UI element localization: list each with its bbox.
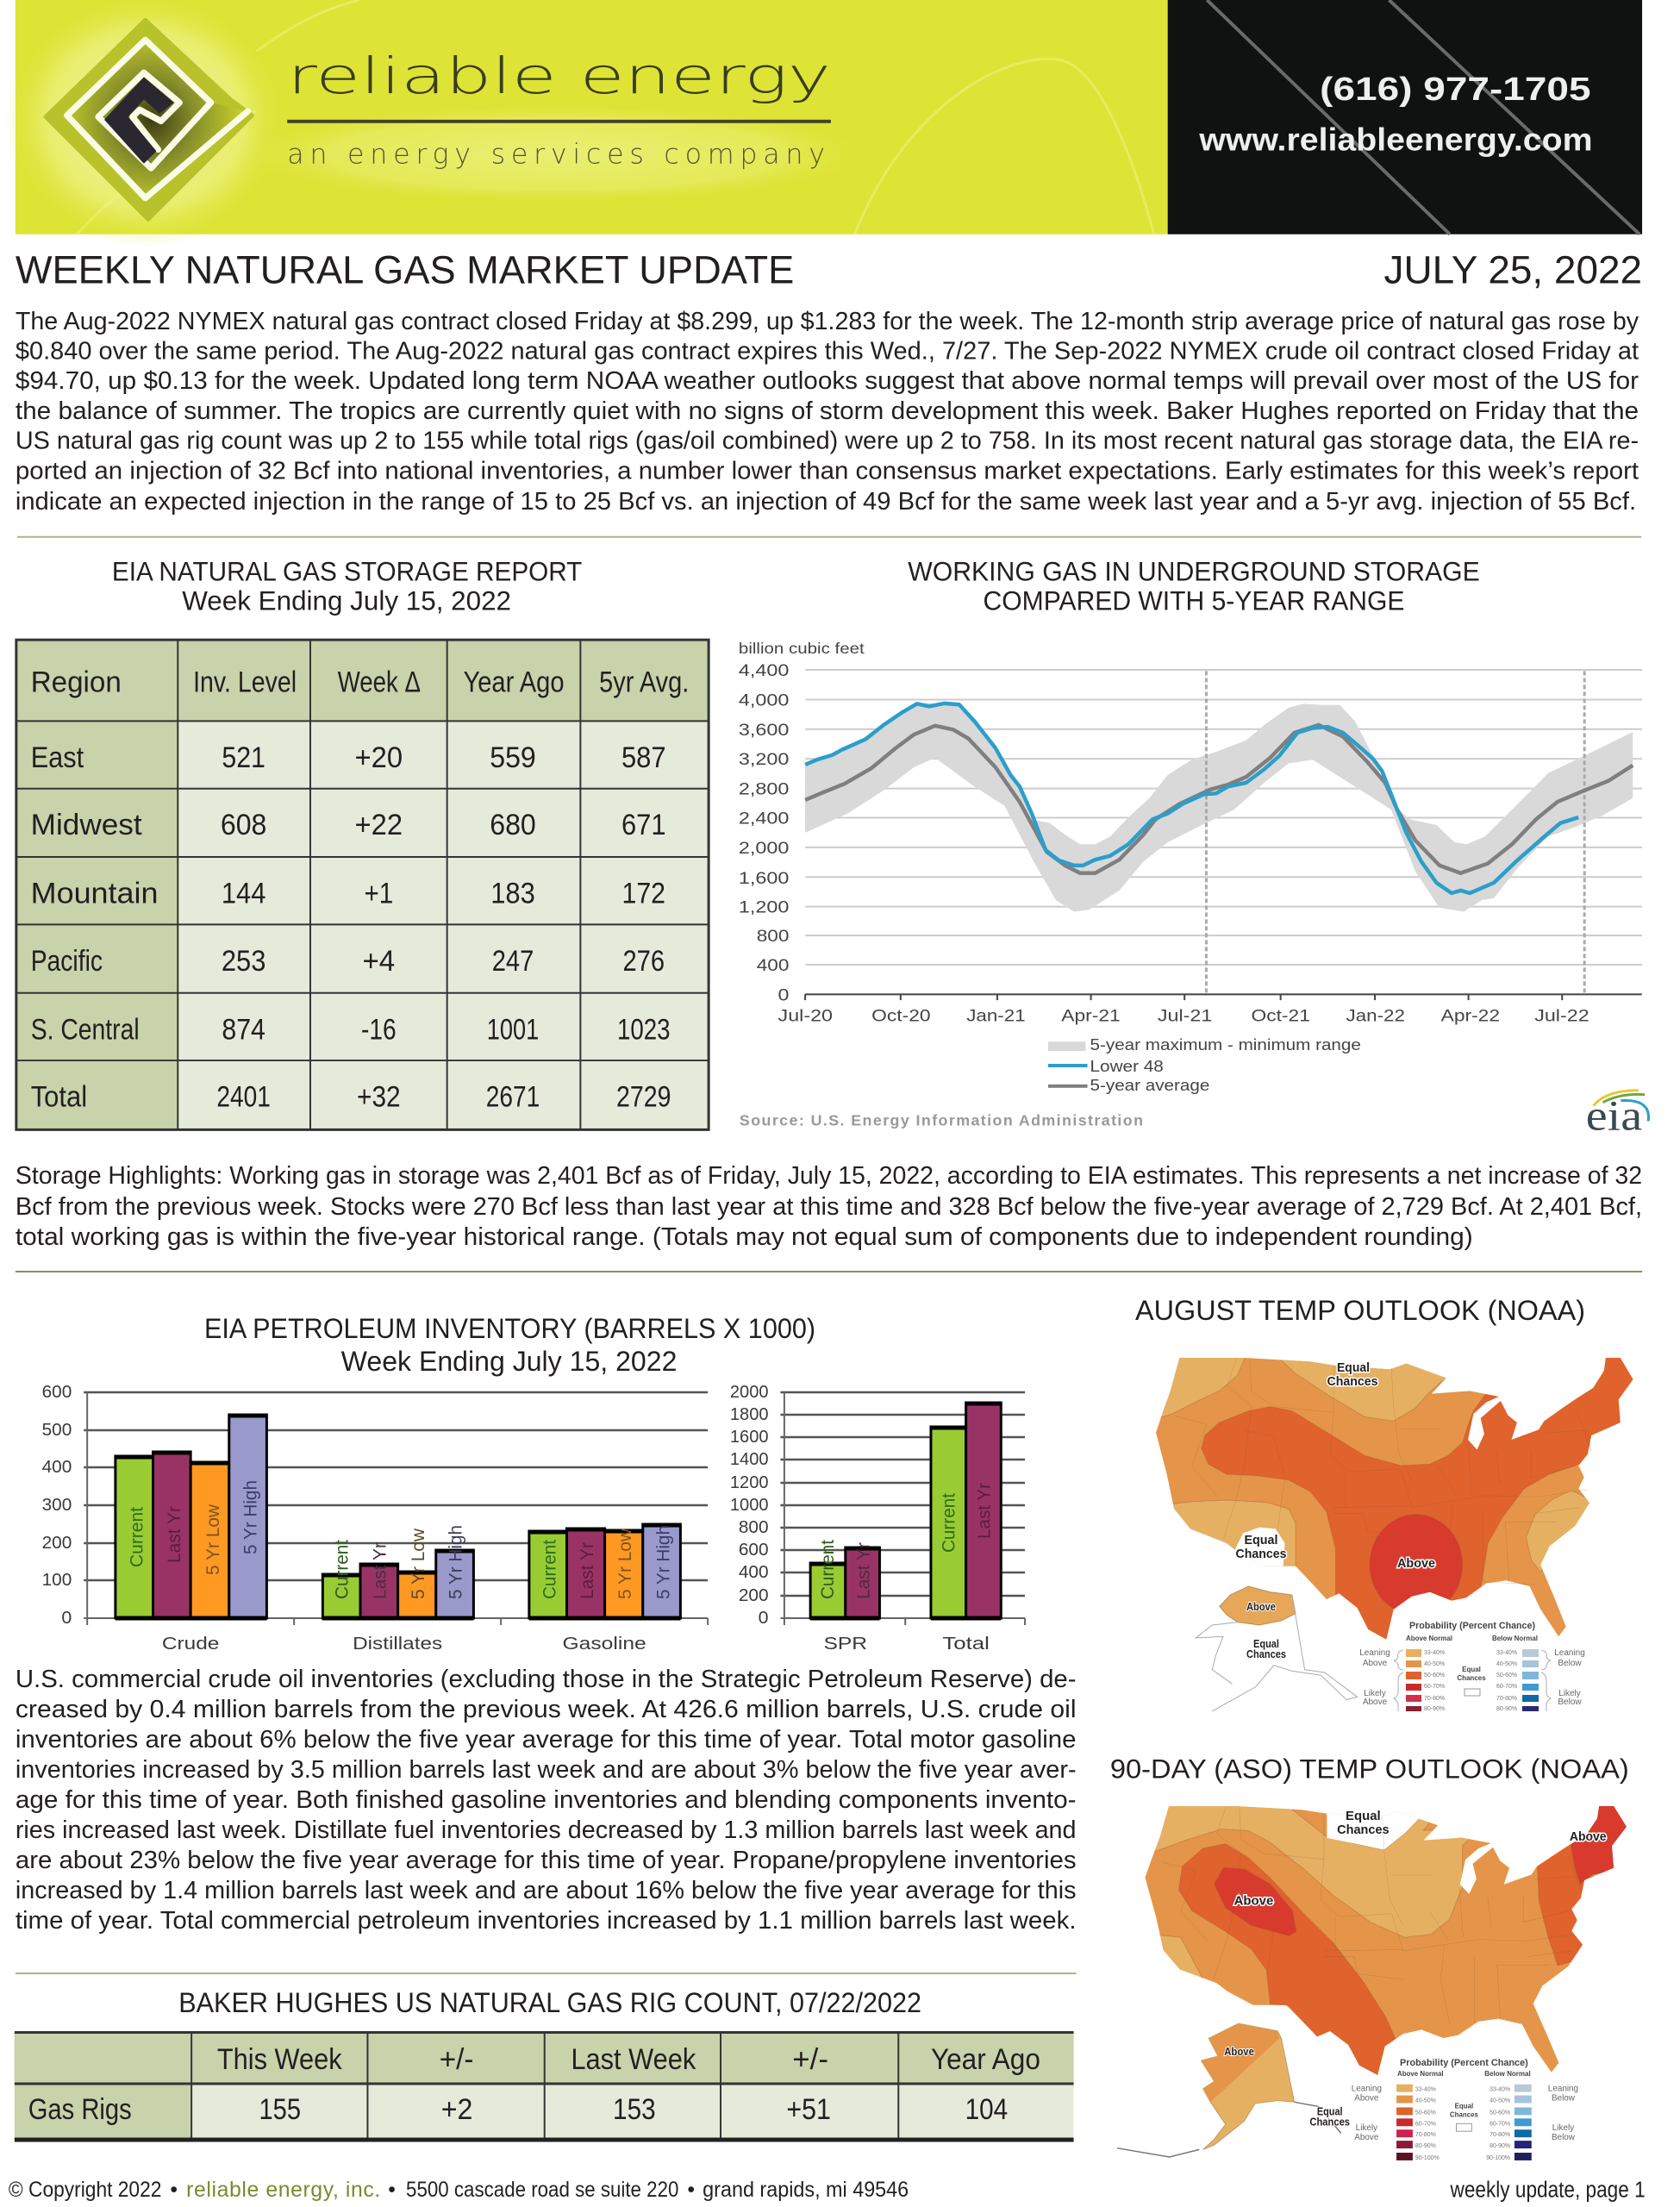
footer: copyright and address: • [687,2178,695,2202]
y axis labels: 0 [61,1609,72,1628]
table: natural gas storage: Region [31,666,122,699]
heading: storage report: Week Ending July 15, 2022 [182,585,511,616]
y axis labels: 1400 [730,1450,769,1469]
bars: crude [116,1415,266,1618]
y axis labels: 400 [757,956,789,975]
company name: reliable energy [287,47,831,105]
map labels [1236,1360,1435,1660]
map labels: Chances [1246,1647,1286,1660]
x axis labels: Jul-22 [1534,1006,1589,1025]
map legend: probability: 60-70% [1415,2121,1436,2127]
text block: storage highlights: total working gas is within the five-year historical range. (Totals may not equal sum of components due to independent rounding) [16,1223,1473,1251]
table: natural gas storage: East [31,741,84,774]
text block: petroleum summary [16,1666,1077,1935]
footer: copyright and address: • [170,2178,178,2202]
table: natural gas storage: 253 [222,945,265,978]
table: rig count: +51 [786,2093,831,2126]
map legend: probability: 40-50% [1424,1661,1445,1667]
map legend: probability: Chances [1450,2110,1479,2118]
table: natural gas storage: -16 [361,1013,397,1046]
y axis labels: 200 [42,1534,72,1553]
map legend: probability: Leaning [1554,1648,1585,1658]
table: natural gas storage: 5yr Avg. [599,666,689,699]
map labels: Above [1246,1600,1276,1613]
map legend: probability: 40-50% [1415,2098,1436,2104]
table: natural gas storage: +1 [364,878,393,910]
map labels: Chances [1327,1374,1377,1389]
map labels: Chances [1236,1547,1286,1561]
text block: market summary: $0.840 over the same period. The Aug-2022 natural gas contract expires this Wed., 7/27. The Sep-2022 NYMEX crude oil contract closed Friday at [16,338,1639,366]
y axis labels: 4,400 [739,661,789,680]
section: storage report [16,556,709,1129]
table: natural gas storage: Total [31,1081,87,1114]
table: natural gas storage: 874 [222,1013,265,1046]
bars: gasoline [529,1524,680,1618]
map labels: Above [1397,1556,1435,1571]
panel: black contact band [1168,0,1642,234]
map legend: probability [1359,1621,1585,1712]
bars: distillates: 5 Yr Low [409,1528,428,1599]
footer: copyright and address: © Copyright 2022 [9,2178,161,2202]
map legend: probability: 80-90% [1415,2143,1436,2149]
bars: gasoline: 5 Yr Low [615,1528,635,1599]
table: natural gas storage: 608 [221,809,266,841]
table: rig count: 153 [613,2093,656,2126]
category labels: Distillates [353,1635,442,1654]
table: natural gas storage [16,640,709,1129]
map legend: probability: 40-50% [1490,2098,1510,2104]
map legend: probability: 60-70% [1496,1684,1517,1690]
map legend: probability: Leaning [1352,2085,1382,2094]
bar chart: SPR and total [730,1383,1025,1654]
text block: petroleum summary: creased by 0.4 million barrels from the previous week. At 426.6 million barrels, U.S. crude oil [16,1696,1077,1723]
phone number: (616) 977-1705 [1320,71,1591,107]
table: rig count: Year Ago [931,2043,1040,2076]
category labels: SPR [824,1635,867,1654]
x axis labels: Oct-20 [871,1006,931,1025]
y axis labels [730,1383,769,1628]
heading: storage report [112,556,582,616]
table: rig count: 155 [259,2093,301,2126]
footer: page number: weekly update, page 1 [1450,2179,1646,2203]
map legend: probability: Likely [1558,1689,1581,1698]
text block: market summary: US natural gas rig count was up 2 to 155 while total rigs (gas/oil combined) were up 2 to 758. In its most recent natural gas storage data, the EIA re- [16,428,1639,455]
bars: distillates: 5 Yr High [447,1525,465,1599]
x axis labels: Jan-22 [1346,1006,1405,1025]
map labels: Equal [1253,1637,1279,1650]
table: natural gas storage: 276 [622,945,665,978]
table: natural gas storage: +20 [355,741,403,774]
map legend: probability: 90-100% [1415,2155,1440,2161]
heading: rig count: BAKER HUGHES US NATURAL GAS RIG COUNT, 07/22/2022 [178,1987,921,2018]
text block: petroleum summary: U.S. commercial crude oil inventories (excluding those in the Strategic Petroleum Reserve) de- [16,1666,1077,1693]
map labels: Equal [1346,1810,1381,1823]
heading: petroleum inventory: Week Ending July 15, 2022 [341,1346,677,1377]
heading: august outlook: AUGUST TEMP OUTLOOK (NOAA) [1135,1295,1585,1326]
map legend: probability: 70-80% [1415,2132,1436,2138]
y axis labels: 600 [739,1541,769,1560]
map legend: probability: 80-90% [1424,1706,1445,1712]
section: header title and market summary [4,0,1642,538]
bars: total: Last Yr [974,1483,994,1539]
y axis labels: 3,600 [739,721,789,740]
map labels: Chances [1309,2115,1350,2128]
tagline: an energy services company [287,139,825,170]
map legend: probability: Chances [1457,1674,1486,1682]
table: natural gas storage: 521 [222,741,265,774]
bars: total: Current [940,1493,959,1553]
bars: SPR: Last Yr [854,1542,874,1599]
text block: market summary: indicate an expected injection in the range of 15 to 25 Bcf vs. an injection of 49 Bcf for the same week last year and a 5-yr avg. injection of 55 Bcf. [16,488,1636,516]
map legend: probability: 33-40% [1490,2087,1510,2093]
map legend: probability: 50-60% [1490,2110,1510,2116]
y axis labels: 0 [759,1609,769,1628]
map legend: probability: Above [1354,2094,1379,2104]
bars: gasoline: Current [540,1540,560,1599]
heading: petroleum inventory [204,1313,815,1377]
map legend: probability: Above Normal [1406,1635,1452,1642]
heading: 90 day outlook: 90-DAY (ASO) TEMP OUTLOOK (NOAA) [1110,1754,1629,1785]
y axis labels: 4,000 [739,691,789,710]
y axis unit label: billion cubic feet [739,640,865,657]
map legend: probability: Leaning [1548,2085,1578,2094]
map legend: probability: Likely [1552,2123,1574,2133]
panel: yellow brand band [4,0,1168,248]
category labels: Crude [162,1635,219,1654]
text block: market summary: The Aug-2022 NYMEX natural gas contract closed Friday at $8.299, up $1.283 for the week. The 12-month strip average price of natural gas rose by [16,308,1639,335]
table: natural gas storage: 2729 [616,1081,671,1114]
x axis labels: Apr-22 [1441,1006,1500,1025]
map legend: probability: 33-40% [1415,2087,1436,2093]
y axis labels: 600 [42,1383,72,1402]
bars: crude: Current [128,1507,147,1567]
table: rig count: Gas Rigs [28,2093,132,2126]
table: natural gas storage: 183 [490,878,535,910]
text block: storage highlights: Bcf from the previous week. Stocks were 270 Bcf less than last year at this time and 328 Bcf below the five-year average of 2,729 Bcf. At 2,401 Bcf, [16,1193,1642,1221]
map legend: probability: 70-80% [1424,1696,1445,1702]
chart legend: Lower 48 [1090,1057,1164,1075]
map legend: probability: 40-50% [1496,1661,1517,1667]
footer: copyright and address: grand rapids, mi 49546 [703,2178,909,2202]
map legend: probability: 80-90% [1496,1706,1517,1712]
y axis labels: 2000 [730,1383,769,1402]
map legend: probability: Likely [1364,1689,1386,1698]
map legend: probability: Equal [1462,1666,1481,1673]
y axis labels [42,1383,72,1628]
y axis labels: 1,600 [739,869,789,888]
table: natural gas storage: 144 [222,878,265,910]
table: natural gas storage: 2401 [216,1081,271,1114]
x axis labels: Oct-21 [1251,1006,1310,1025]
table: natural gas storage: Year Ago [464,666,565,699]
table: natural gas storage: +32 [357,1081,401,1114]
alaska [1117,2023,1341,2157]
map labels: Above [1234,1894,1273,1908]
table: rig count: This Week [217,2043,342,2076]
bars: crude: 5 Yr High [241,1480,260,1554]
y axis labels: 2,000 [739,839,789,858]
footer: copyright and address: reliable energy, inc. [186,2178,380,2202]
map legend: probability: Below [1552,2094,1576,2104]
map legend: probability: 33-40% [1496,1650,1517,1656]
table: natural gas storage: 247 [492,945,534,978]
map legend: probability: 50-60% [1496,1672,1517,1679]
text block: petroleum summary: ries increased last week. Distillate fuel inventories decreased by 1.3 million barrels last week and [16,1816,1077,1844]
map legend: probability: 70-80% [1496,1696,1517,1702]
map labels: Above [1224,2045,1254,2058]
chart source: Source: U.S. Energy Information Administration [740,1111,1143,1129]
y axis labels: 200 [739,1586,769,1605]
map legend: probability: 50-60% [1424,1672,1445,1679]
heading: working gas chart: COMPARED WITH 5-YEAR RANGE [984,585,1404,616]
table: natural gas storage: Pacific [31,945,103,978]
text block: market summary: the balance of summer. The tropics are currently quiet with no signs of storm development this week. Baker Hughes reported on Friday that the [16,397,1639,425]
y axis labels: 400 [42,1458,72,1477]
chart legend: 5-year average [1090,1076,1209,1094]
table: rig count: Last Week [571,2043,696,2076]
map legend: probability: Below Normal [1484,2070,1531,2078]
map: august temperature outlook [1151,1354,1640,1712]
table: rig count [15,2032,1074,2140]
heading: storage report: EIA NATURAL GAS STORAGE REPORT [112,556,582,587]
table: natural gas storage: Inv. Level [193,666,297,699]
table: natural gas storage: 587 [621,741,666,774]
text block: petroleum summary: time of year. Total commercial petroleum inventories increased by 1.1 million barrels last week. [16,1907,1077,1935]
section: working gas chart [739,556,1649,1139]
line chart: working gas in storage [739,640,1649,1139]
map legend: probability: 60-70% [1490,2121,1510,2127]
table: natural gas storage: S. Central [31,1013,140,1046]
x axis labels [778,1006,1589,1025]
category labels: Total [942,1635,990,1654]
map legend: probability: 80-90% [1490,2143,1510,2149]
date: JULY 25, 2022 [1384,247,1642,291]
map legend: probability: Below Normal [1492,1635,1538,1642]
text block: market summary: ported an injection of 32 Bcf into national inventories, a number lower than consensus market expectations. Early estimates for this week’s report [16,457,1639,485]
table: natural gas storage: 172 [621,878,665,910]
map labels [1224,1810,1607,2128]
x axis labels: Apr-21 [1061,1006,1121,1025]
table: rig count: +2 [441,2093,472,2126]
footer: copyright and address: 5500 cascade road se suite 220 [406,2178,678,2202]
table: natural gas storage: +22 [355,809,403,841]
map labels: Equal [1317,2104,1343,2117]
y axis labels: 100 [42,1571,72,1590]
category labels [162,1635,646,1654]
table: natural gas storage: 680 [490,809,536,841]
section: highlights petroleum rigs footer [9,1162,1642,2202]
chart legend: 5-year maximum - minimum range [1090,1035,1361,1053]
y axis labels: 800 [757,927,789,946]
text block: market summary [16,308,1639,516]
text block: storage highlights [16,1162,1642,1251]
footer: copyright and address: • [388,2178,396,2202]
footer: copyright and address [9,2178,909,2202]
map legend: probability: Probability (Percent Chance) [1409,1621,1535,1631]
y axis labels: 1000 [730,1496,769,1515]
y axis labels: 800 [739,1518,769,1537]
icon: reliable energy diamond logo [46,20,253,220]
map legend: probability: Above [1363,1697,1388,1707]
y axis labels: 1200 [730,1473,769,1492]
x axis labels: Jan-21 [966,1006,1026,1025]
map legend: probability: 50-60% [1415,2110,1436,2116]
bars: total [931,1403,1001,1618]
text block: petroleum summary: inventories are about 6% below the five year average for this time of year. Total motor gasoline [16,1726,1077,1754]
table: rig count: 104 [965,2093,1008,2126]
text block: petroleum summary: are about 23% below the five year average for this time of year. Propane/propylene inventories [16,1847,1077,1874]
bars: SPR: Current [818,1540,838,1599]
text block: petroleum summary: age for this time of year. Both finished gasoline inventories and blending components invento- [16,1786,1077,1814]
map legend: probability [1352,2058,1578,2161]
bars: distillates: Last Yr [370,1542,390,1599]
heading: working gas chart [908,556,1480,616]
text block: petroleum summary: increased by 1.4 million barrels last week and are about 16% below the five year average for this [16,1877,1077,1904]
map legend: probability: Leaning [1359,1648,1390,1658]
table: natural gas storage: Midwest [31,809,142,841]
text block: market summary: $94.70, up $0.13 for the week. Updated long term NOAA weather outlooks suggest that above normal temps will prevail over most of the US for [16,367,1639,395]
website: www.reliableenergy.com [1198,122,1593,158]
y axis labels: 500 [42,1421,72,1440]
chart legend [1048,1035,1361,1094]
map legend: probability: Below [1558,1659,1582,1668]
map legend: probability: Equal [1455,2102,1473,2110]
bars: crude: Last Yr [165,1506,184,1563]
map: 90 day temperature outlook [1117,1801,1636,2161]
map legend: probability: Below [1552,2133,1576,2142]
map legend: probability: 33-40% [1424,1650,1445,1656]
y axis labels: 300 [42,1496,72,1515]
map legend: probability: Above [1363,1659,1388,1668]
table: rig count: +/- [440,2043,473,2076]
section: 90 day outlook [1110,1754,1646,2203]
bars: distillates [322,1525,473,1618]
map legend: probability: Above Normal [1397,2070,1444,2078]
map labels: Equal [1245,1533,1277,1547]
map legend: probability: Below [1558,1697,1582,1707]
header banner [4,0,1642,248]
table: natural gas storage: +4 [362,945,395,978]
bars: gasoline: Last Yr [578,1542,597,1599]
category labels: Gasoline [563,1635,646,1654]
map legend: probability: 90-100% [1486,2155,1510,2161]
text block: storage highlights: Storage Highlights: Working gas in storage was 2,401 Bcf as of Friday, July 15, 2022, according to EIA estimates. This represents a net increase of 32 [16,1162,1642,1190]
map labels: Equal [1337,1360,1370,1375]
map legend: probability: Above [1354,2133,1379,2142]
table: natural gas storage: Week Δ [338,666,421,699]
y axis labels: 1600 [730,1428,769,1447]
table: natural gas storage: 559 [490,741,536,774]
table: rig count: +/- [792,2043,828,2076]
table: natural gas storage: 671 [621,809,666,841]
icon: eia logo: eia [1586,1091,1642,1139]
heading: petroleum inventory: EIA PETROLEUM INVENTORY (BARRELS X 1000) [204,1313,815,1344]
map legend: probability: 60-70% [1424,1684,1445,1690]
y axis labels: 2,400 [739,809,789,828]
bars: SPR [810,1540,879,1618]
map labels: Above [1570,1830,1607,1844]
category labels [824,1635,990,1654]
bar chart: crude distillates gasoline [42,1383,708,1654]
map legend: probability: 70-80% [1490,2132,1510,2138]
company name rule [287,120,831,123]
x axis labels: Jul-21 [1158,1006,1212,1025]
table: natural gas storage: 2671 [486,1081,540,1114]
map labels: Chances [1337,1823,1390,1837]
map legend: probability: Likely [1356,2123,1377,2133]
y axis labels: 2,800 [739,780,789,799]
y axis labels: 1800 [730,1405,769,1424]
y axis labels [739,661,789,1005]
y axis labels: 1,200 [739,897,789,916]
y axis labels: 400 [739,1563,769,1582]
table: natural gas storage: 1001 [487,1013,539,1046]
bars: distillates: Current [333,1540,353,1599]
title: WEEKLY NATURAL GAS MARKET UPDATE [16,247,794,291]
bars: crude: 5 Yr Low [203,1504,223,1575]
y axis labels: 3,200 [739,750,789,769]
table: natural gas storage: 1023 [617,1013,670,1046]
text block: petroleum summary: inventories increased by 3.5 million barrels last week and are about 3% below the five year aver- [16,1756,1077,1784]
heading: working gas chart: WORKING GAS IN UNDERGROUND STORAGE [908,556,1480,587]
table: natural gas storage: Mountain [31,878,158,910]
x axis labels: Jul-20 [778,1006,833,1025]
y axis labels: 0 [778,986,789,1005]
bars: gasoline: 5 Yr High [654,1525,673,1599]
map legend: probability: Probability (Percent Chance) [1400,2058,1528,2068]
